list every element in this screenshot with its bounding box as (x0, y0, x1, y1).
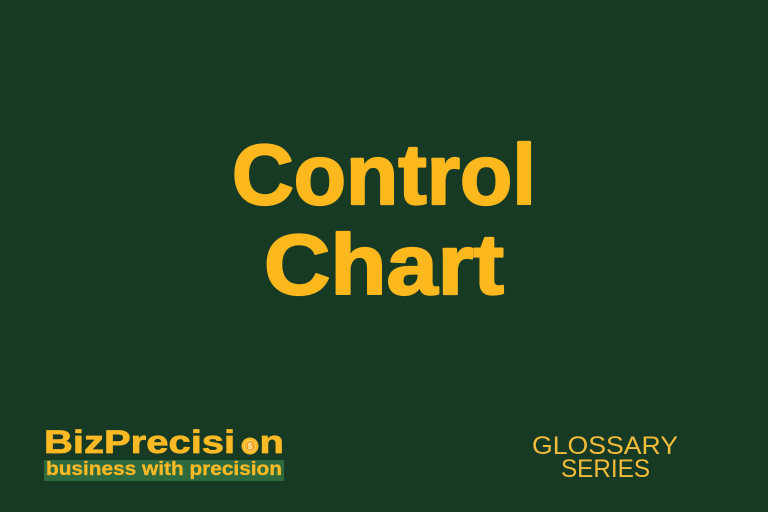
logo: BizPrecision (44, 424, 284, 481)
title (232, 128, 536, 313)
series label: SERIES (561, 455, 650, 483)
tagline: business with precision (46, 459, 282, 480)
icon: coin (242, 438, 258, 454)
series label (532, 432, 678, 483)
series label: GLOSSARY (532, 432, 678, 460)
title: Chart (264, 218, 504, 313)
title: Control (232, 128, 536, 223)
logo wordmark: BizPrecisi on (44, 424, 284, 460)
icon: coin: $ (248, 442, 253, 451)
tagline bar (44, 460, 284, 481)
